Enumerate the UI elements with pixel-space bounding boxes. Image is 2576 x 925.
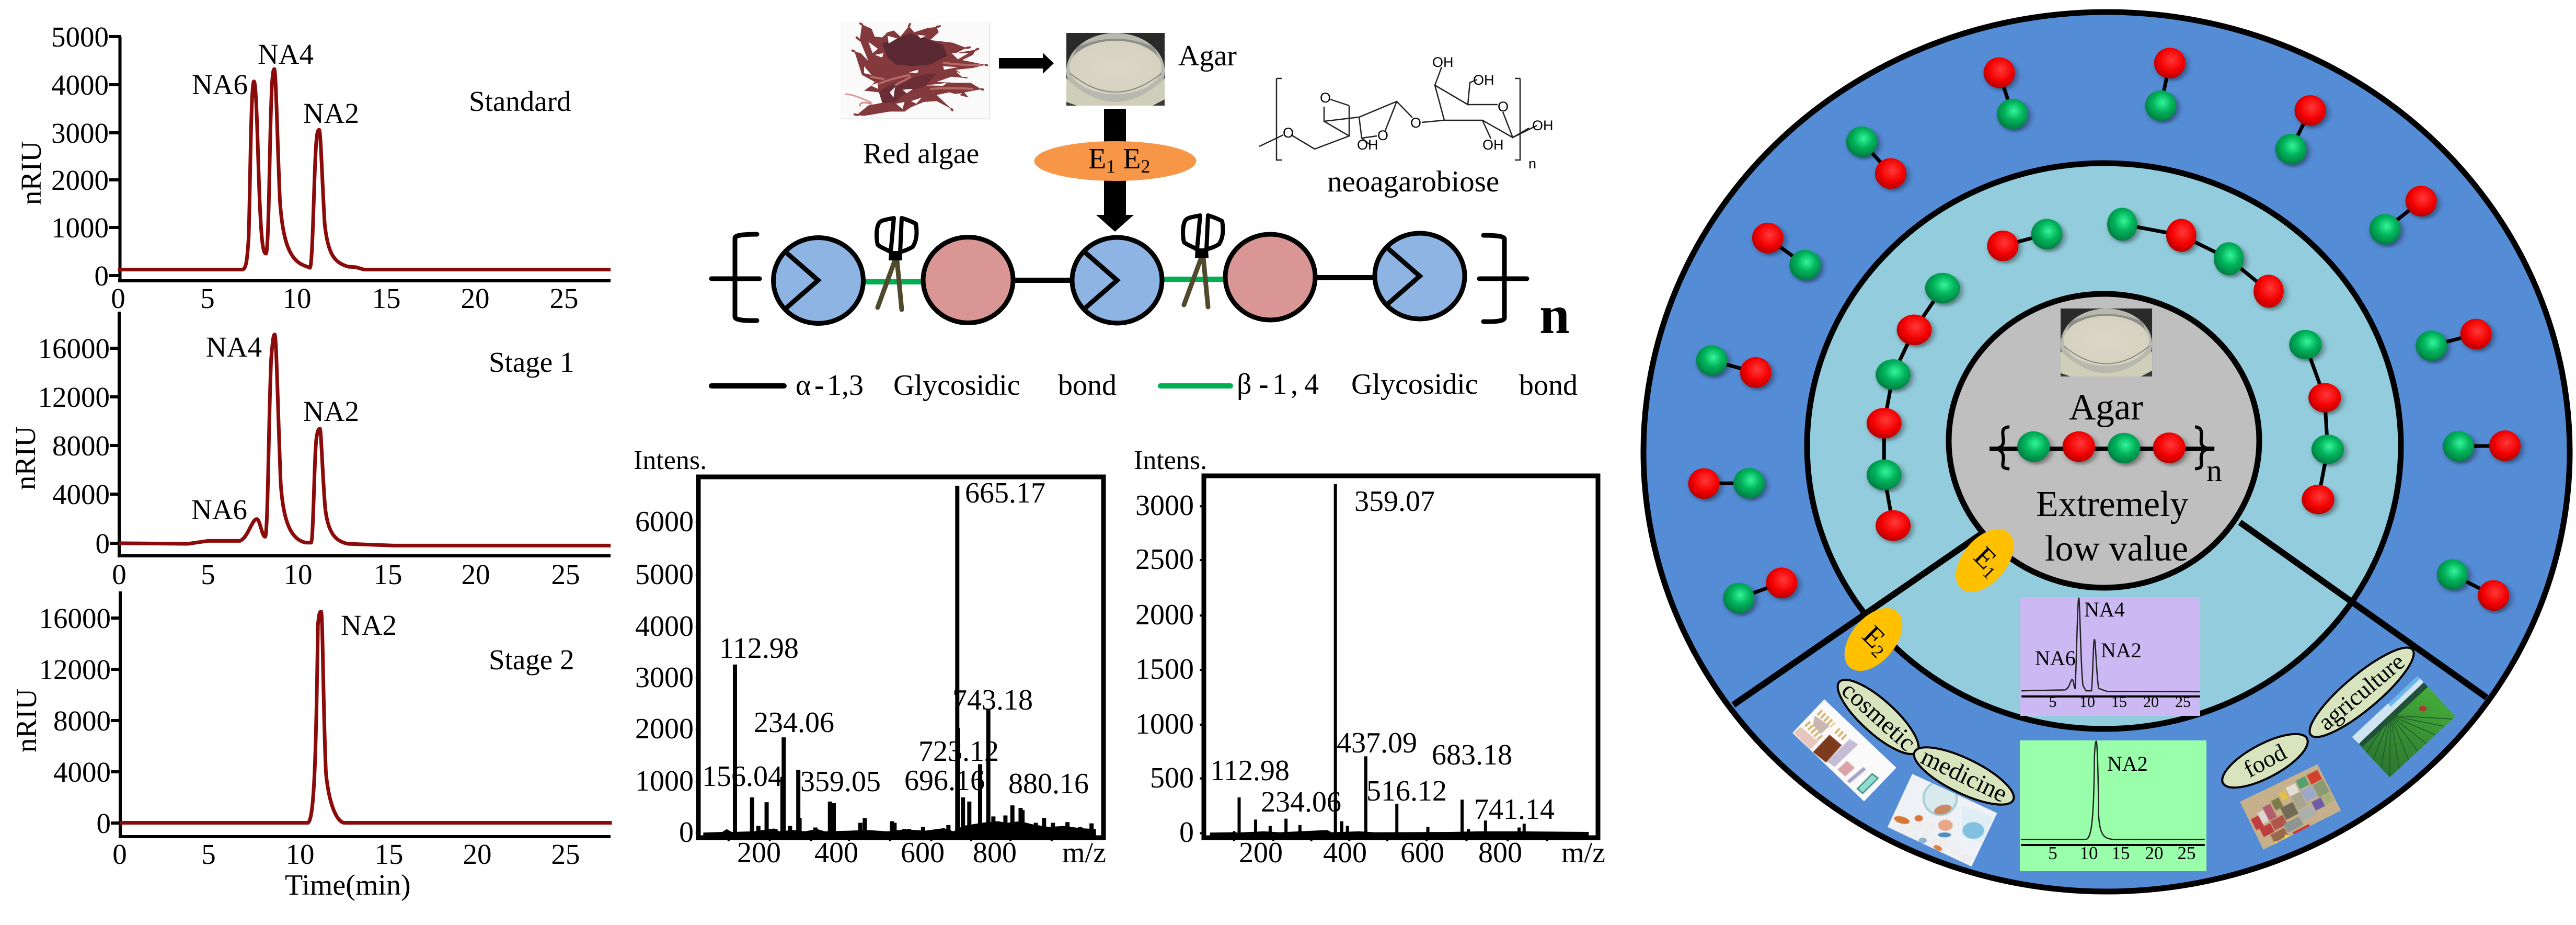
x tick labels: 200 — [1239, 837, 1283, 869]
peak labels and title: NA2 — [303, 395, 359, 427]
legend: glycosidic bonds — [711, 368, 1578, 402]
trace — [119, 335, 611, 545]
inset chart: purple stage 1: 15 — [2111, 693, 2127, 711]
enzyme badge E1: 1 — [1979, 563, 1999, 583]
x tick labels: m/z — [1561, 837, 1605, 869]
y tick labels — [1135, 489, 1194, 849]
alpha bond label: 1,3 — [827, 369, 864, 402]
frame — [1204, 476, 1598, 838]
label: Red algae: Red algae — [863, 138, 979, 170]
y tick labels: 4000 — [52, 478, 110, 510]
y tick labels: 6000 — [635, 506, 694, 538]
x tick labels: 5 — [201, 838, 216, 870]
peak labels: 156.04 — [702, 760, 783, 793]
bonds — [1014, 278, 1373, 280]
peak labels and title — [192, 38, 571, 129]
y tick labels: 0 — [95, 528, 110, 559]
x tick labels — [111, 282, 578, 314]
peak labels: 359.07 — [1354, 485, 1435, 518]
panel: chromatogram Stage 2 — [10, 591, 612, 901]
enzyme ellipse: 1 — [1106, 156, 1116, 177]
y tick labels: 0 — [96, 807, 111, 839]
y tick labels: 0 — [1179, 816, 1194, 849]
enzyme badge E1 — [1945, 518, 2025, 603]
inset chart: green stage 2: 20 — [2145, 843, 2163, 863]
application label: medicine: medicine — [1917, 743, 2011, 808]
x tick labels: 800 — [973, 837, 1017, 869]
peak labels: 683.18 — [1432, 739, 1512, 771]
image: agriculture field — [2352, 676, 2455, 778]
image: red algae — [841, 22, 990, 119]
inset chart: purple stage 1: NA6 — [2035, 646, 2076, 670]
axes — [110, 312, 611, 557]
structure atom labels: O — [1410, 115, 1421, 131]
alpha bond label: Glycosidic — [893, 369, 1020, 402]
inset chart: purple stage 1 — [2020, 597, 2200, 716]
peak labels and title — [191, 331, 574, 526]
x tick labels: 200 — [737, 837, 781, 869]
x tick labels: 5 — [201, 558, 215, 590]
peak labels: 665.17 — [965, 477, 1045, 509]
structure atom labels: n — [1528, 156, 1536, 172]
inner core — [1949, 294, 2259, 588]
y tick labels: 3000 — [51, 117, 109, 149]
icon: scissors right — [1183, 215, 1223, 307]
enzyme badge E1: E — [1968, 540, 2003, 575]
structure atom labels: O — [1377, 128, 1388, 143]
application label: cosmetic: cosmetic — [1836, 676, 1921, 757]
x tick labels: 400 — [1323, 837, 1367, 869]
peak labels: 741.14 — [1474, 793, 1555, 826]
application label: food: food — [2239, 738, 2291, 783]
y tick labels: 16000 — [39, 602, 111, 634]
peak labels: 696.16 — [904, 764, 985, 797]
y tick labels: 2000 — [1135, 599, 1194, 631]
label: neoagarobiose: neoagarobiose — [1327, 165, 1499, 198]
peak labels: 359.05 — [800, 766, 881, 798]
structure atom labels: OH — [1432, 54, 1453, 70]
beta bond label: 1 — [1272, 368, 1287, 401]
peak labels and title: NA6 — [191, 494, 247, 526]
repeat index n: n — [1539, 285, 1570, 345]
inset chart: purple stage 1: 5 — [2049, 693, 2056, 711]
icon: scissors left — [877, 218, 917, 310]
panel: value upgrade concentric diagram — [1643, 12, 2570, 892]
enzyme ellipse: E — [1116, 143, 1141, 175]
beta bond label: , — [1291, 368, 1298, 401]
x tick labels: 400 — [814, 837, 858, 869]
enzyme badge E2: 2 — [1867, 642, 1888, 662]
y axis title: Intens. — [634, 446, 707, 475]
inset chart: purple stage 1: NA2 — [2101, 638, 2142, 662]
application label: medicine — [1907, 736, 2021, 816]
y tick labels: 1000 — [51, 212, 109, 244]
sector dividers — [1733, 522, 2487, 705]
y tick labels: 2000 — [51, 164, 109, 196]
x tick labels: 10 — [285, 838, 315, 870]
structure atom labels: OH — [1357, 137, 1378, 153]
panel: mass spectrum left — [634, 446, 1106, 869]
application label: agriculture: agriculture — [2313, 648, 2410, 735]
frame — [698, 477, 1103, 838]
peak labels: 234.06 — [754, 706, 834, 739]
x tick labels: 600 — [901, 837, 945, 869]
beta bond label — [1237, 368, 1578, 402]
peak labels — [702, 477, 1089, 800]
peak labels: 516.12 — [1366, 775, 1447, 807]
image: agar powder — [1066, 33, 1165, 110]
x tick labels — [737, 837, 1106, 869]
polymer chain icon — [1990, 427, 2214, 469]
subscript n: n — [2206, 453, 2222, 488]
peak labels: 743.18 — [952, 684, 1033, 716]
axes — [111, 591, 611, 838]
enzyme badge E2: E — [1856, 619, 1891, 654]
inset chart: green stage 2: 25 — [2178, 843, 2195, 863]
structure atom labels: OH — [1473, 72, 1494, 88]
image: cosmetic products — [1792, 699, 1896, 802]
free disaccharide and chain molecules — [1688, 48, 2521, 613]
application label: agriculture — [2300, 636, 2423, 748]
image: agar powder in core — [2061, 309, 2152, 380]
inset chart: green stage 2: NA2 — [2107, 752, 2148, 775]
enzyme ellipse — [1034, 141, 1196, 181]
panel: chromatogram Stage 1 — [9, 312, 611, 590]
inset chart: green stage 2 — [2020, 740, 2206, 871]
y tick labels: 12000 — [39, 654, 111, 686]
inset chart: purple stage 1: 10 — [2079, 693, 2095, 711]
peak labels: 880.16 — [1008, 768, 1089, 800]
y tick labels: 1000 — [1135, 708, 1194, 740]
inset chart: purple stage 1: NA4 — [2084, 598, 2125, 621]
label: Extremely low value — [2036, 484, 2189, 569]
peak labels and title: NA4 — [206, 331, 262, 363]
peak labels: 234.06 — [1261, 786, 1341, 818]
peak labels — [1210, 485, 1555, 826]
y axis title: Intens. — [1134, 446, 1207, 475]
beta bond label: - — [1259, 368, 1269, 401]
enzyme ellipse: 2 — [1141, 156, 1150, 177]
alpha bond label: bond — [1058, 369, 1117, 402]
arrow: agar to chain — [1096, 109, 1134, 232]
trace — [120, 612, 612, 823]
inset chart: green stage 2: 5 — [2048, 843, 2057, 863]
y tick labels: 12000 — [38, 381, 110, 413]
y tick labels: 8000 — [53, 705, 111, 737]
x tick labels: 800 — [1478, 837, 1522, 869]
y tick labels: 0 — [94, 260, 109, 292]
peak labels and title: NA6 — [192, 68, 248, 100]
peak label and title: Stage 2 — [489, 644, 574, 676]
x tick labels: 20 — [463, 838, 491, 870]
label: Extremely low value: low value — [2045, 529, 2188, 569]
x tick labels: 15 — [374, 838, 404, 870]
outer ring: high value oligosaccharide — [1643, 12, 2570, 892]
inset chart: green stage 2: 15 — [2112, 843, 2130, 863]
peak labels: 723.12 — [918, 735, 999, 768]
structure atom labels: OH — [1482, 137, 1503, 153]
panel: glycosidic chain diagram — [711, 215, 1570, 345]
peak labels: 112.98 — [719, 632, 799, 665]
x tick labels: 10 — [283, 558, 313, 590]
y tick labels: 3000 — [635, 661, 694, 694]
beta bond sample — [1160, 383, 1230, 389]
peak labels and title: Standard — [469, 85, 571, 117]
peak label and title: NA2 — [341, 609, 397, 641]
axes — [109, 37, 611, 282]
structure atom labels: O — [1283, 125, 1294, 141]
structure atom labels: O — [1320, 90, 1331, 106]
peak labels and title: NA4 — [258, 38, 314, 70]
y tick labels: 500 — [1150, 762, 1194, 794]
y tick labels: 3000 — [1135, 489, 1194, 522]
inset chart: purple stage 1: 20 — [2143, 693, 2159, 711]
panel: chromatogram Standard — [15, 21, 611, 314]
x tick labels: 25 — [550, 282, 578, 314]
y tick labels: 5000 — [51, 21, 109, 53]
panel: mass spectrum right — [1134, 446, 1605, 869]
image: medicine pills — [1888, 774, 1997, 866]
alpha bond label: α — [796, 369, 811, 402]
y tick labels — [38, 333, 110, 559]
enzyme badge E2 — [1833, 597, 1914, 682]
x tick labels: m/z — [1062, 837, 1106, 869]
chemical structure: neoagarobiose — [1259, 54, 1554, 198]
y axis title: nRIU — [10, 689, 42, 752]
beta bond label: bond — [1519, 369, 1578, 402]
x tick labels: 600 — [1400, 837, 1444, 869]
x tick labels: 20 — [461, 558, 490, 590]
x tick labels: 0 — [111, 282, 125, 314]
x axis title: Time(min) — [285, 869, 411, 901]
y tick labels: 5000 — [635, 558, 694, 591]
structure atom labels — [1283, 54, 1554, 172]
y tick labels: 0 — [679, 816, 694, 849]
beta bond label: 4 — [1304, 368, 1319, 401]
middle ring — [1807, 163, 2401, 729]
peak label and title — [341, 609, 574, 676]
structure atom labels: O — [1498, 99, 1509, 115]
peak labels: 437.09 — [1337, 727, 1417, 759]
x tick labels: 5 — [200, 282, 215, 314]
beta bond label: β — [1237, 368, 1251, 401]
y tick labels: 4000 — [635, 610, 694, 643]
x tick labels: 20 — [461, 282, 489, 314]
label: Agar: Agar — [2069, 387, 2143, 428]
x tick labels — [1239, 837, 1605, 869]
y tick labels: 4000 — [51, 69, 109, 101]
brackets — [711, 234, 1527, 322]
alpha bond sample — [711, 383, 784, 389]
y tick labels: 8000 — [52, 430, 110, 462]
inset chart: green stage 2: 10 — [2079, 843, 2098, 863]
x tick labels: 15 — [373, 558, 402, 590]
y tick labels: 1000 — [635, 765, 694, 797]
structure atom labels: OH — [1532, 118, 1554, 133]
inset chart: purple stage 1: 25 — [2175, 693, 2191, 711]
y tick labels — [635, 506, 694, 849]
y tick labels: 2000 — [635, 713, 694, 745]
peak labels: 112.98 — [1210, 755, 1290, 787]
application label: food — [2215, 724, 2315, 798]
alpha bond label: - — [814, 369, 824, 402]
sugar ring units — [774, 233, 1465, 323]
panel: agar production flow — [841, 22, 1237, 232]
y tick labels: 1500 — [1135, 653, 1194, 686]
trace — [118, 69, 611, 269]
structure bonds — [1259, 67, 1537, 160]
x tick labels: 0 — [112, 838, 127, 870]
image: food products — [2240, 764, 2342, 854]
alpha bond label — [796, 369, 1117, 402]
y axis title: nRIU — [9, 426, 41, 490]
y tick labels: 4000 — [53, 756, 111, 788]
peak labels and title: Stage 1 — [489, 346, 574, 378]
y tick labels: 2500 — [1135, 543, 1194, 576]
arrow: algae to agar — [999, 53, 1054, 74]
y tick labels: 16000 — [38, 333, 110, 364]
enzyme ellipse: E — [1088, 143, 1106, 175]
x tick labels: 25 — [551, 558, 580, 590]
y axis title: nRIU — [15, 141, 47, 205]
peak labels and title: NA2 — [303, 97, 359, 129]
label: Agar: Agar — [1178, 40, 1237, 72]
peaks — [1200, 484, 1589, 841]
beta bond label: Glycosidic — [1351, 368, 1478, 401]
peaks — [696, 486, 1096, 841]
x tick labels: 25 — [551, 838, 580, 870]
y tick labels — [51, 21, 109, 292]
x tick labels: 0 — [112, 558, 126, 590]
x tick labels — [112, 558, 580, 590]
x tick labels — [112, 838, 580, 870]
x tick labels: 15 — [372, 282, 400, 314]
x tick labels: 10 — [282, 282, 312, 314]
label: Extremely low value: Extremely — [2036, 484, 2189, 524]
y tick labels — [39, 602, 111, 839]
